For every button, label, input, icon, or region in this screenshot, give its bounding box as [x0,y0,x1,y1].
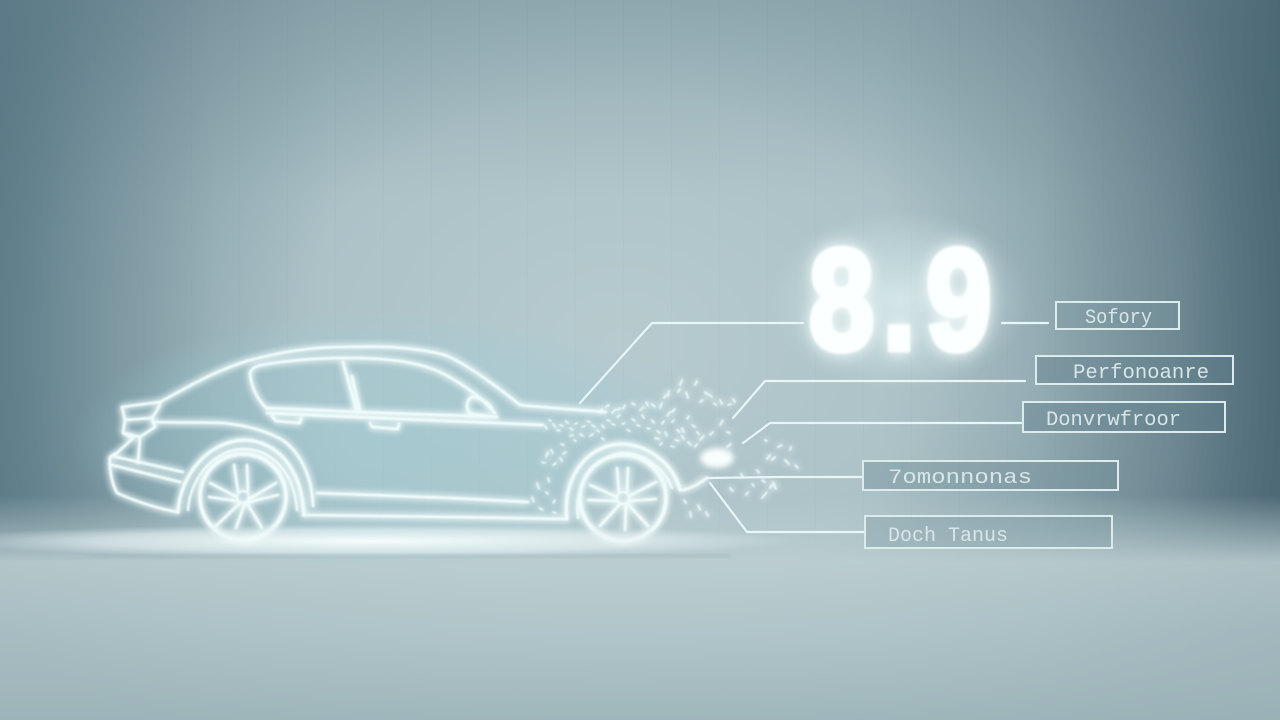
label box: fifth item: Doch Tanus [888,525,1008,548]
label box: third item: Donvrwfroor [1046,409,1181,432]
connector lines [580,323,1048,532]
connector: safety score [580,323,803,403]
tail end [110,402,183,512]
connector: fifth box [710,483,865,532]
front wheel [566,444,707,541]
score number: 8.9 [809,220,991,380]
connector: fourth box [707,477,863,478]
window outline [250,358,495,413]
debris particles [532,380,798,517]
number halo [770,210,1030,390]
label box: fourth item [863,461,1118,490]
label box: safety [1056,302,1179,330]
sill lines [303,493,567,519]
connector: third box [743,423,1023,443]
label box: performance [1036,356,1233,385]
rear wheel [178,440,304,540]
roof and hood line [122,347,606,412]
label box: fourth item: 7omonnonas [888,467,1032,490]
label box: performance: Perfonoanre [1073,362,1209,385]
label box: third item [1023,402,1225,432]
floor light sweep [0,524,800,558]
floor [0,495,1280,720]
car halo [70,310,710,570]
mirror [467,397,497,417]
label box: fifth item [865,516,1112,548]
connector: performance [733,381,1025,418]
car outline [110,347,707,541]
connector: score to safety box [1002,322,1048,324]
trunk line and rear arch [153,422,313,506]
impact burst [700,448,734,468]
door handles [272,416,399,429]
door pillar [343,362,360,412]
label box: safety: Sofory [1085,307,1152,330]
window bottom and belt line [267,408,543,425]
floor reflection [90,554,730,558]
